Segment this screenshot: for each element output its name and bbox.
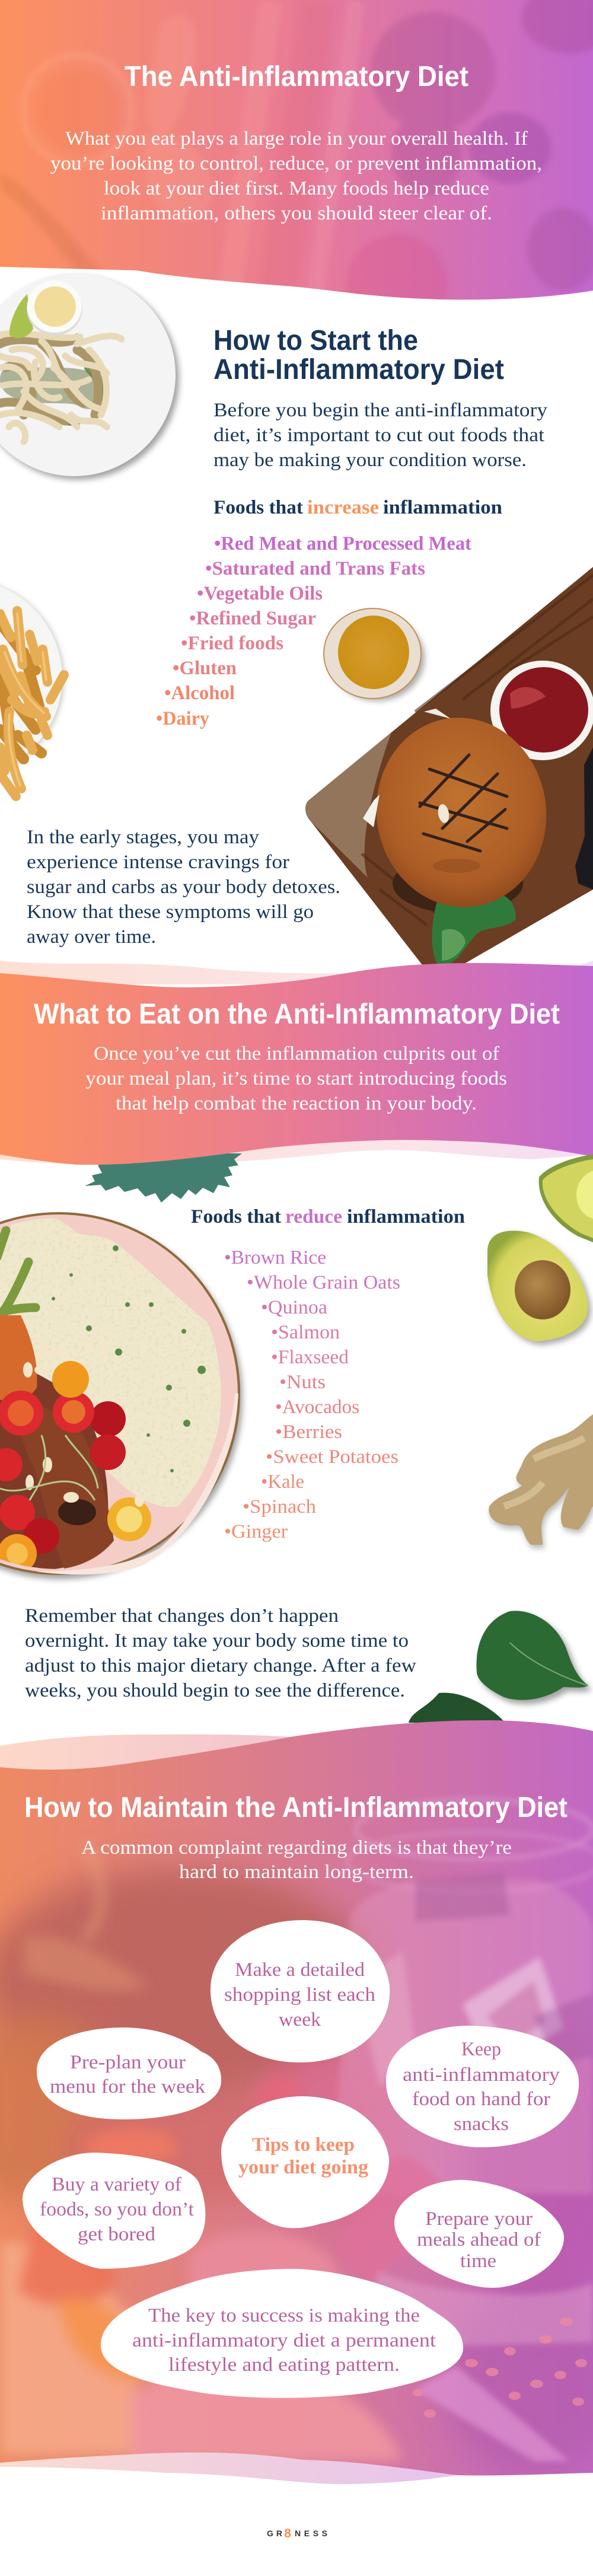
paragraph: Once you’ve cut the inflammation culprits out of <box>94 1043 499 1064</box>
tomatoes <box>90 1401 126 1437</box>
list: foods that reduce inflammation: •Whole Grain Oats <box>247 1272 400 1293</box>
icon: rice and salmon plate <box>0 1212 243 1579</box>
burger <box>363 707 559 967</box>
bubble: keep food on hand <box>386 2026 579 2147</box>
bubble: buy a variety: get bored <box>78 2224 156 2245</box>
panel: how to maintain <box>0 1714 593 2484</box>
paragraph: early stages: Know that these symptoms will go <box>27 901 314 923</box>
subheading: foods that increase: inflammation <box>383 497 502 518</box>
panel: how to start <box>27 325 548 948</box>
list: foods that increase inflammation: •Red Meat and Processed Meat <box>214 533 471 554</box>
paragraph: remember: weeks, you should begin to see the difference. <box>25 1680 405 1701</box>
intro text: look at your diet first. Many foods help reduce <box>104 178 489 199</box>
heading <box>213 325 504 385</box>
logo: GR8NESS: GR <box>267 2529 282 2538</box>
bubble: prepare meals <box>394 2180 564 2288</box>
icon: avocado halves <box>487 1155 593 1345</box>
paragraph: remember <box>25 1605 416 1701</box>
logo: GR8NESS: NESS <box>295 2529 327 2538</box>
intro text: What you eat plays a large role in your overall health. If <box>65 128 528 149</box>
intro text: inflammation, others you should steer clear of. <box>101 203 492 224</box>
bubble: shopping list: Make a detailed <box>235 1959 365 1981</box>
icon: calamari plate <box>0 273 179 480</box>
what to eat band <box>0 963 593 1165</box>
bubble: key to success: anti-inflammatory diet a permanent <box>132 2330 436 2351</box>
icon: honey bowl <box>324 608 425 701</box>
intro paragraph: diet, it’s important to cut out foods that <box>213 425 544 446</box>
logo: GR8NESS: 8 <box>284 2527 291 2540</box>
bubble: tips to keep your diet going: your diet going <box>238 2157 369 2178</box>
bubble: tips to keep your diet going <box>221 2096 389 2228</box>
list: foods that increase inflammation: •Saturated and Trans Fats <box>205 558 425 579</box>
paragraph: that help combat the reaction in your body. <box>116 1093 477 1114</box>
bubble: shopping list: week <box>279 2009 321 2030</box>
salmon <box>0 1315 37 1403</box>
list: foods that increase inflammation: •Refined Sugar <box>189 608 316 629</box>
heading: How to Maintain the Anti-Inflammatory Diet <box>24 1792 568 1823</box>
bubble: pre-plan: menu for the week <box>50 2076 206 2097</box>
paragraph: remember: overnight. It may take your body some time to <box>25 1630 409 1652</box>
bubble: key to success <box>101 2269 463 2398</box>
bubble: prepare meals: time <box>460 2250 496 2272</box>
bubble: keep food on hand: snacks <box>454 2113 509 2135</box>
paragraph: A common complaint regarding diets is that they’re <box>81 1837 512 1858</box>
heading: How to Start the <box>213 325 418 356</box>
paragraph: early stages: sugar and carbs as your body detoxes. <box>27 876 340 898</box>
subheading <box>191 1206 465 1228</box>
panel: intro header <box>0 0 593 300</box>
bubble: keep food on hand: anti-inflammatory <box>403 2064 560 2086</box>
green beans <box>0 1230 36 1319</box>
ketchup cup <box>490 661 593 760</box>
paragraph: early stages <box>27 827 340 948</box>
paragraph: early stages: In the early stages, you may <box>27 827 260 848</box>
paragraph <box>85 1043 507 1114</box>
top pale wave <box>0 1735 291 1770</box>
icon: burger on cutting board <box>305 567 593 978</box>
subheading: inflammation <box>347 1206 465 1228</box>
list: foods that increase inflammation: •Alcohol <box>164 683 235 704</box>
bubble: buy a variety: Buy a variety of <box>52 2174 181 2195</box>
list: foods that reduce inflammation: •Brown Rice <box>224 1247 326 1268</box>
title: The Anti-Inflammatory Diet <box>125 61 468 93</box>
paragraph <box>81 1837 512 1883</box>
subheading: foods that increase <box>213 497 502 518</box>
list: foods that increase inflammation: •Dairy <box>156 708 209 729</box>
bubble: pre-plan <box>37 2027 221 2119</box>
header gradient background <box>0 0 593 300</box>
kale leaf <box>85 1153 242 1203</box>
paragraph: hard to maintain long-term. <box>179 1861 414 1883</box>
intro paragraph <box>213 400 548 471</box>
list: foods that reduce inflammation: •Quinoa <box>261 1297 327 1318</box>
bubble: prepare meals: meals ahead of <box>417 2229 541 2250</box>
bubble: tips to keep your diet going: Tips to keep <box>252 2134 355 2156</box>
icon: spinach leaves <box>409 1611 592 1723</box>
paragraph: remember: adjust to this major dietary change. After a few <box>25 1655 416 1676</box>
list: foods that reduce inflammation <box>224 1247 400 1542</box>
base of food <box>0 1364 108 1571</box>
logo: GR8NESS <box>267 2527 327 2540</box>
list: foods that reduce inflammation: •Nuts <box>279 1372 326 1393</box>
bottom pale wave <box>0 1127 593 1165</box>
intro paragraph: Before you begin the anti-inflammatory <box>213 400 548 421</box>
intro text <box>50 128 542 224</box>
bubble: key to success: The key to success is making the <box>148 2305 420 2326</box>
list: foods that reduce inflammation: •Salmon <box>271 1322 340 1343</box>
heading: Anti-Inflammatory Diet <box>213 354 504 385</box>
top pale wave <box>0 961 593 984</box>
bubble: shopping list: shopping list each <box>224 1984 376 2006</box>
knife <box>575 747 593 890</box>
list: foods that reduce inflammation: •Sweet Potatoes <box>266 1446 398 1468</box>
list: foods that reduce inflammation: •Kale <box>261 1471 304 1493</box>
bubble: buy a variety <box>23 2153 205 2269</box>
paragraph: remember: Remember that changes don’t happen <box>25 1605 339 1627</box>
list: foods that reduce inflammation: •Avocados <box>275 1397 359 1418</box>
bubble: shopping list <box>211 1920 390 2062</box>
list: foods that reduce inflammation: •Flaxseed <box>271 1347 349 1368</box>
bubble: pre-plan: Pre-plan your <box>70 2052 186 2073</box>
panel: foods that reduce <box>191 1206 465 1542</box>
list: foods that increase inflammation <box>156 533 471 729</box>
panel: what to eat <box>0 961 593 1203</box>
bubble: keep food on hand: food on hand for <box>412 2089 550 2110</box>
heading: What to Eat on the Anti-Inflammatory Diet <box>34 999 560 1030</box>
subheading: Foods that <box>191 1206 281 1228</box>
pine nuts and sprouts <box>23 1339 144 1507</box>
subheading: foods that increase: Foods that <box>213 497 303 518</box>
cutting board <box>305 567 593 978</box>
subheading: foods that increase: increase <box>307 497 379 518</box>
list: foods that increase inflammation: •Vegetable Oils <box>197 583 323 604</box>
bubble: key to success: lifestyle and eating pattern. <box>168 2354 400 2376</box>
section background with blurred food photo <box>0 1714 593 2479</box>
icon: ginger root <box>489 1414 593 1548</box>
list: foods that reduce inflammation: •Berries <box>275 1421 342 1443</box>
list: foods that increase inflammation: •Fried foods <box>181 633 283 654</box>
paragraph: early stages: away over time. <box>27 926 156 948</box>
bottom pale wave <box>0 2453 457 2484</box>
list: foods that reduce inflammation: •Spinach <box>243 1496 317 1517</box>
list: foods that increase inflammation: •Gluten <box>173 658 237 679</box>
intro text: you’re looking to control, reduce, or prevent inflammation, <box>50 153 542 174</box>
list: foods that reduce inflammation: •Ginger <box>224 1521 288 1542</box>
rice <box>0 1214 221 1507</box>
subheading: reduce <box>285 1206 342 1228</box>
icon: fries plate <box>0 580 64 796</box>
bubble: prepare meals: Prepare your <box>425 2208 533 2230</box>
intro paragraph: may be making your condition worse. <box>213 449 527 471</box>
paragraph: your meal plan, it’s time to start introducing foods <box>85 1068 507 1089</box>
paragraph: early stages: experience intense cravings for <box>27 852 289 873</box>
bubble: buy a variety: foods, so you don’t <box>40 2199 194 2220</box>
bubble: keep food on hand: Keep <box>461 2039 501 2060</box>
